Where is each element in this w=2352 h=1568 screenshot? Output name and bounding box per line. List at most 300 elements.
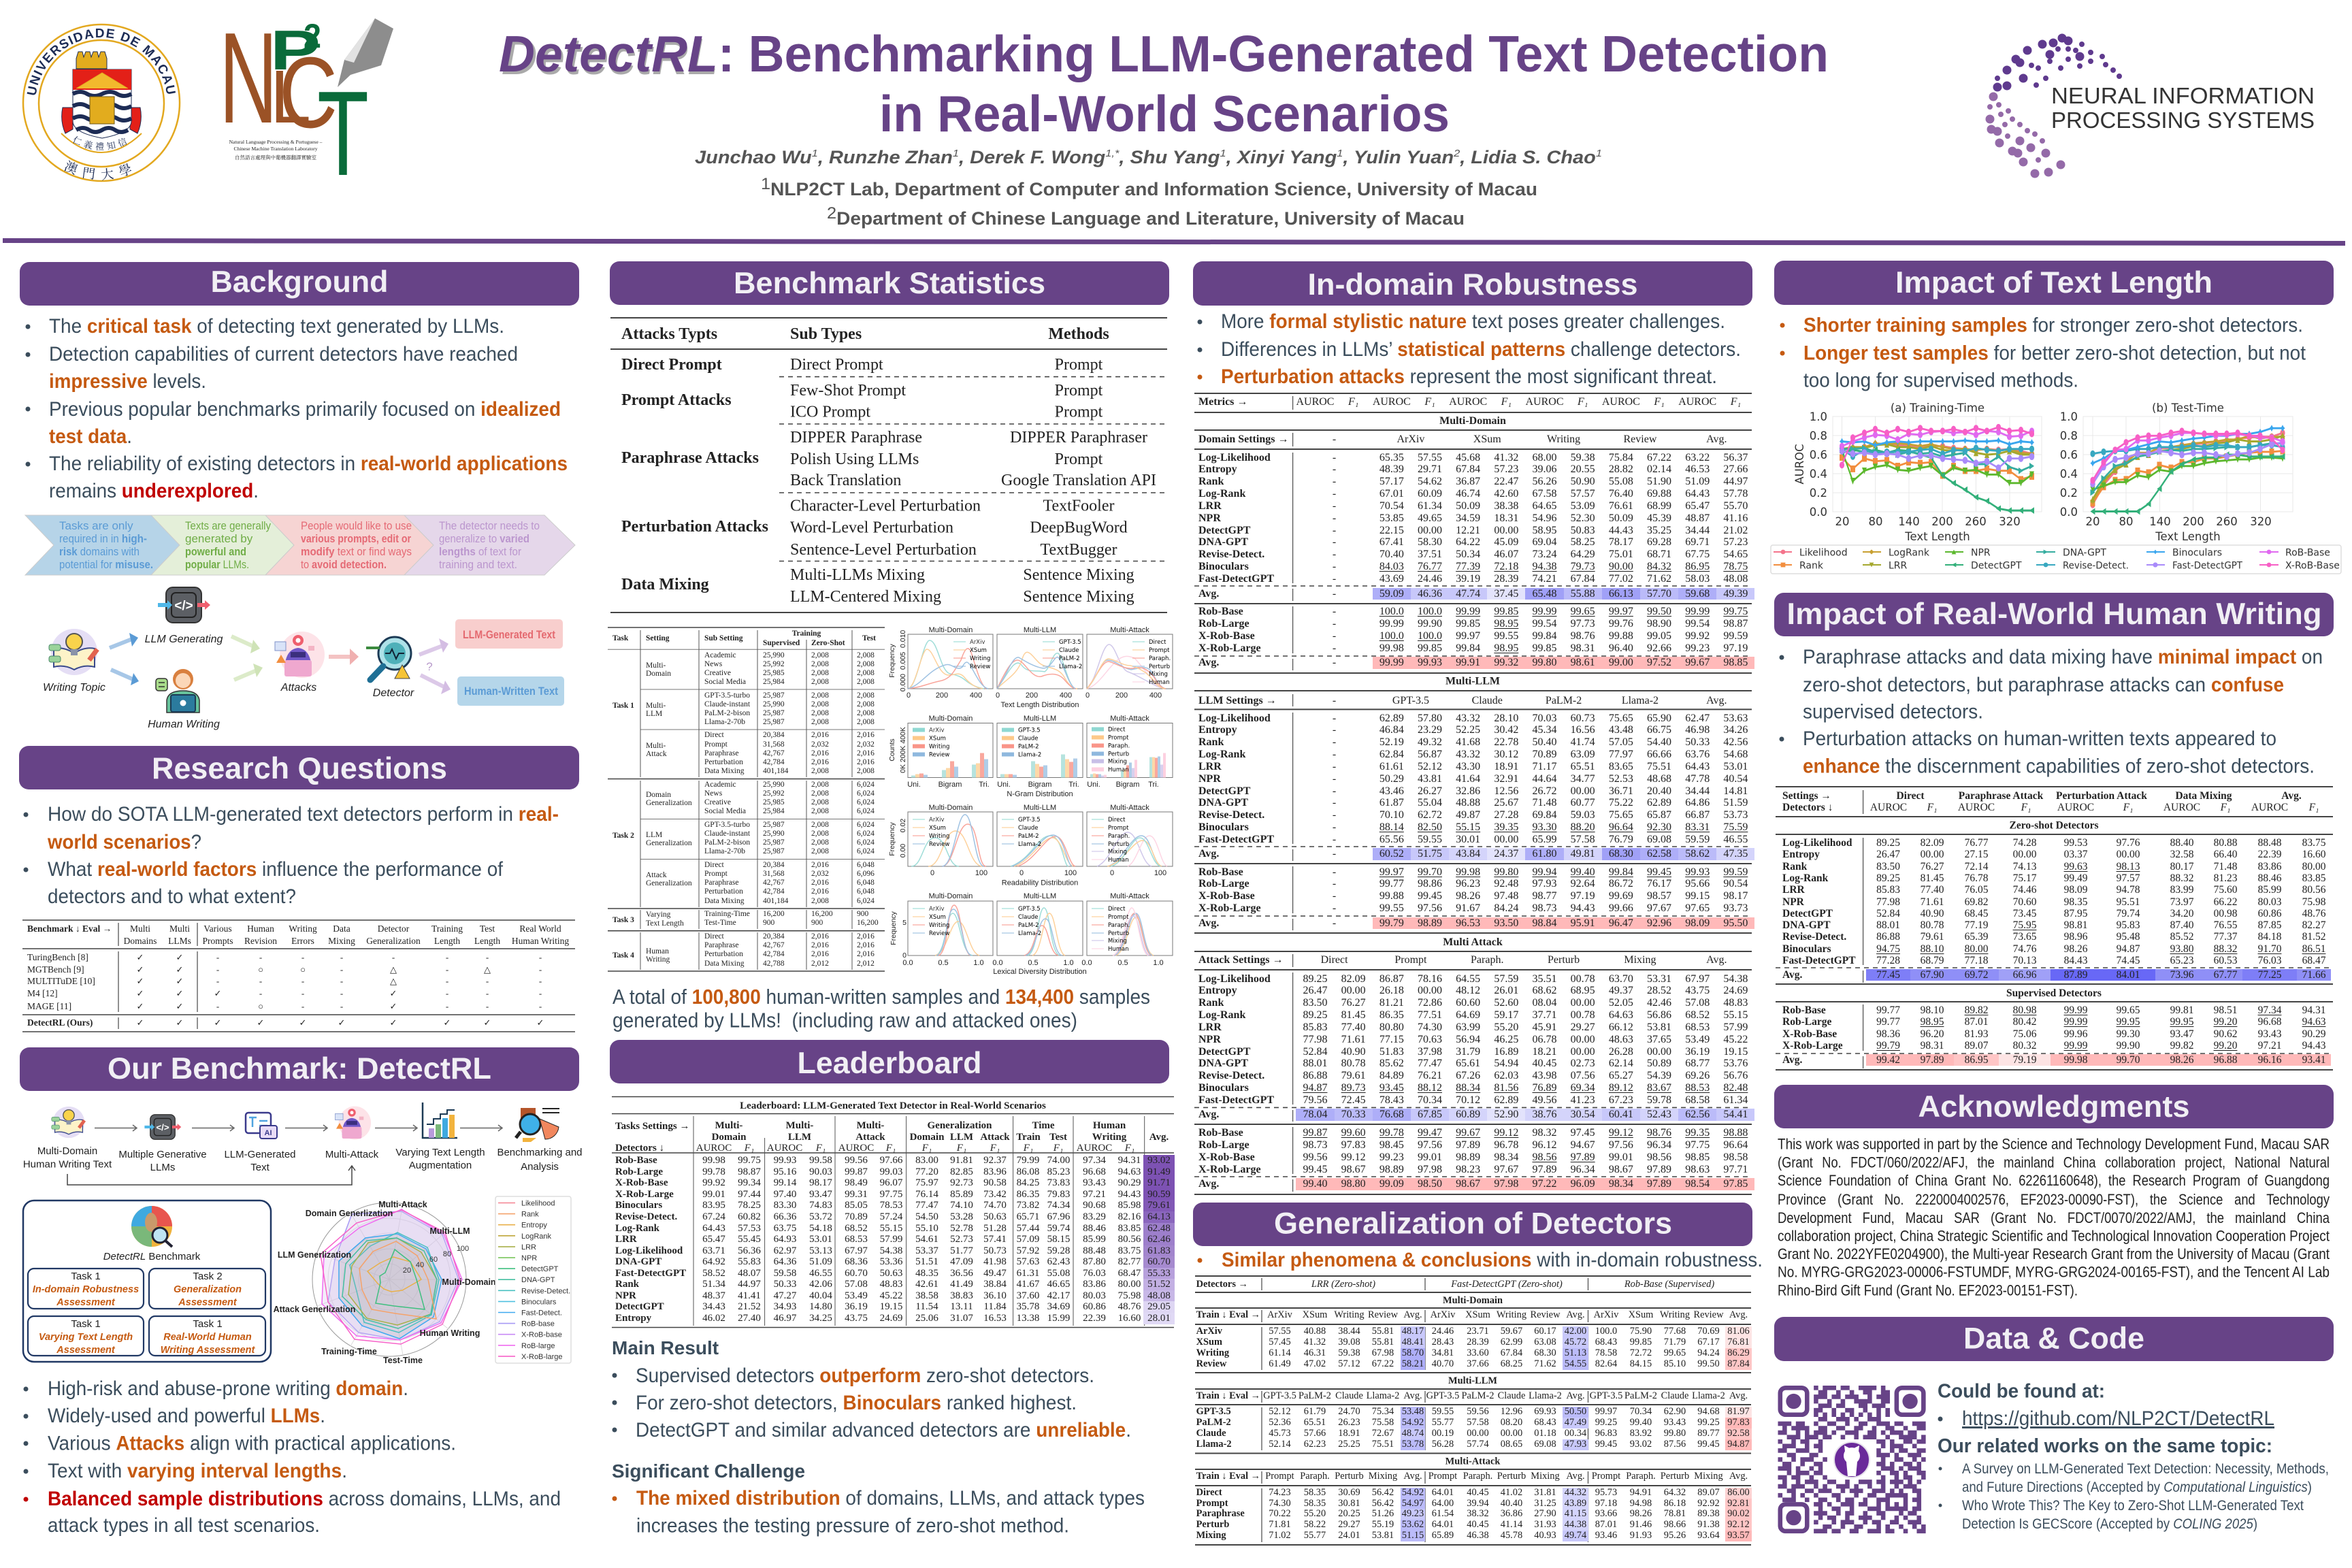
table: benchmark comparison: Length <box>474 936 500 946</box>
table: multi-domain robustness: 99.97 <box>1609 606 1633 617</box>
table: generalization multi-LLM: GPT-3.5 <box>1590 1390 1622 1401</box>
flow: benchmark construction: LLM-Generated <box>224 1149 296 1160</box>
table: multi-attack robustness: 78.04 <box>1303 1109 1327 1120</box>
table: generalization multi-attack: 95.26 <box>1664 1530 1686 1541</box>
table: multi-LLM robustness: 20.40 <box>1647 785 1671 797</box>
table body: dataset settings rows: 6,096 <box>857 870 875 878</box>
table: multi-LLM robustness: 61.80 <box>1533 848 1557 860</box>
table: multi-LLM robustness: 30.42 <box>1494 724 1518 736</box>
charts: distribution small multiples: Readability Distribution <box>1002 879 1078 887</box>
table: leaderboard scores: 51.77 <box>950 1245 973 1256</box>
table: multi-attack robustness: 98.54 <box>1685 1178 1710 1190</box>
table: leaderboard scores: 55.33 <box>1147 1268 1171 1279</box>
table body: dataset settings rows: 6,024 <box>857 789 875 798</box>
table: generalization multi-attack: 86.18 <box>1664 1498 1686 1509</box>
table: leaderboard scores: 57.63 <box>1017 1256 1039 1267</box>
table: human writing scores: X-Rob-Base <box>1782 1028 1837 1040</box>
table body: dataset settings rows: Data Mixing <box>704 960 744 968</box>
table: human writing scores: 98.95 <box>1921 1016 1944 1028</box>
table: human writing scores: 76.27 <box>1921 861 1944 872</box>
table body: dataset settings rows: 42,784 <box>763 887 785 896</box>
table: leaderboard scores: 94.63 <box>1118 1166 1141 1177</box>
table: leaderboard scores: 88.48 <box>1083 1245 1106 1256</box>
table: multi-attack robustness: 48.83 <box>1723 997 1748 1009</box>
icon: human writing <box>156 669 199 713</box>
table: leaderboard scores: 54.50 <box>915 1211 938 1222</box>
table: human writing scores: 77.40 <box>1921 884 1944 896</box>
table: human writing scores: 76.77 <box>1965 837 1988 849</box>
table: multi-domain robustness: 99.85 <box>1533 642 1557 654</box>
table: human writing scores: 80.42 <box>2013 1016 2036 1028</box>
table: benchmark comparison: △ <box>484 964 491 975</box>
table: leaderboard scores: 14.80 <box>809 1301 832 1312</box>
table: benchmark comparison: ✓ <box>176 976 183 986</box>
table: multi-LLM robustness: 83.65 <box>1609 761 1633 772</box>
table: generalization multi-attack: 53.62 <box>1402 1519 1424 1530</box>
chart: radar of detectors: 20 <box>403 1267 411 1275</box>
table: multi-attack robustness: 98.67 <box>1456 1178 1480 1190</box>
table: multi-LLM robustness: 25.67 <box>1494 797 1518 808</box>
table: human writing scores: 91.70 <box>2258 943 2281 955</box>
table: human writing scores: 99.99 <box>2064 1016 2087 1028</box>
table: multi-attack robustness: 68.53 <box>1685 1022 1710 1033</box>
table: human writing scores: Log-Rank <box>1782 872 1828 884</box>
table: leaderboard scores: 15.99 <box>1047 1313 1070 1324</box>
text block: main result: DetectGPT and similar advanced detectors are unreliable. <box>636 1419 1131 1441</box>
table: multi-attack robustness: 00.00 <box>1571 1046 1595 1058</box>
table body: dataset settings rows: 25,990 <box>763 700 785 708</box>
table: human writing scores: 98.09 <box>2064 884 2087 896</box>
table: leaderboard scores: 13.11 <box>950 1301 973 1312</box>
table: generalization multi-domain: 76.81 <box>1727 1337 1750 1348</box>
table frame: dataset settings: Domain <box>646 791 671 799</box>
table: generalization multi-domain: Writing <box>1196 1348 1229 1358</box>
table header: leaderboard: AUROC <box>838 1143 874 1154</box>
table: multi-LLM robustness: 70.89 <box>1533 749 1557 760</box>
table: leaderboard scores: 48.07 <box>738 1268 761 1279</box>
table: generalization multi-attack: Avg. <box>1403 1471 1422 1482</box>
chart: test-time AUROC: Text Length <box>2155 530 2221 543</box>
table: generalization multi-LLM: 53.48 <box>1402 1406 1424 1417</box>
logo: NLP2CT <box>219 6 393 201</box>
chevrons: four problem statements: modify text or find ways <box>301 545 412 558</box>
table: human writing scores: 82.27 <box>2302 919 2325 931</box>
table: multi-LLM robustness: 98.17 <box>1723 890 1748 902</box>
table: attack types: Sentence Mixing <box>1023 588 1134 606</box>
table: human writing scores: 97.89 <box>1921 1054 1944 1066</box>
table: generalization multi-attack: 30.69 <box>1338 1487 1360 1498</box>
table: multi-attack robustness: 97.89 <box>1456 1139 1480 1151</box>
table: attack types: Prompt <box>1055 356 1103 374</box>
table: generalization multi-attack: Paraph. <box>1300 1471 1330 1482</box>
text block: dataset size: generated by LLMs! (including raw and attacked ones) <box>612 1009 1077 1032</box>
table: human writing scores: 80.78 <box>1921 919 1944 931</box>
table: human writing scores: 99.79 <box>1876 1040 1900 1051</box>
charts: distribution small multiples: 400 <box>1060 691 1072 700</box>
table header: leaderboard: Domain <box>712 1132 747 1143</box>
authors: 1 <box>812 148 818 159</box>
table: multi-LLM robustness: Binoculars <box>1198 821 1249 833</box>
table body: dataset settings rows: 2,008 <box>857 767 875 775</box>
table: human writing scores: 73.65 <box>2013 931 2036 943</box>
table body: dataset settings rows: 2,008 <box>811 691 829 700</box>
charts: distribution small multiples: 0.5 <box>938 959 949 967</box>
legend: radar detectors: Rank <box>521 1211 539 1219</box>
table: generalization multi-domain: 39.08 <box>1338 1337 1360 1348</box>
table: leaderboard scores: 96.07 <box>880 1177 902 1188</box>
table: generalization multi-attack: 36.86 <box>1501 1508 1522 1519</box>
table: generalization multi-domain: 68.43 <box>1595 1337 1617 1348</box>
table: multi-LLM robustness: 60.73 <box>1571 713 1595 724</box>
heading: Benchmark Statistics <box>610 261 1169 305</box>
table: human writing scores: 73.45 <box>2013 908 2036 919</box>
table: multi-domain robustness: AUROC <box>1449 396 1487 408</box>
table body: dataset settings rows: 900 <box>763 919 774 927</box>
table: benchmark comparison: Human <box>247 924 274 934</box>
table: leaderboard scores: X-Rob-Large <box>615 1189 674 1200</box>
table: multi-LLM robustness: Rank <box>1198 736 1224 748</box>
table: generalization multi-LLM: 68.43 <box>1534 1417 1556 1428</box>
text block: significant challenge: increases the testing pressure of zero-shot method. <box>636 1515 1069 1537</box>
table: multi-LLM robustness: 43.46 <box>1379 785 1404 797</box>
table frame: dataset settings: Test <box>862 634 876 642</box>
table: leaderboard scores: 75.98 <box>1118 1290 1141 1301</box>
table: leaderboard scores: 98.87 <box>738 1166 761 1177</box>
table: leaderboard scores: 99.93 <box>774 1155 796 1166</box>
table body: dataset settings rows: 2,008 <box>811 807 829 815</box>
table: multi-LLM robustness: 65.56 <box>1379 834 1404 845</box>
table: multi-LLM robustness: 52.12 <box>1418 761 1442 772</box>
table body: dataset settings rows: 25,990 <box>763 651 785 659</box>
table: multi-LLM robustness: 99.93 <box>1685 866 1710 878</box>
table: benchmark comparison: - <box>539 964 542 975</box>
table body: dataset settings rows: Creative <box>704 669 731 677</box>
table: generalization multi-domain: ArXiv <box>1267 1309 1292 1320</box>
table: multi-LLM robustness: 71.48 <box>1533 797 1557 808</box>
table: multi-LLM robustness: 53.73 <box>1723 809 1748 821</box>
legend: line charts: Likelihood <box>1799 547 1848 558</box>
legend: line charts: NPR <box>1971 547 1991 558</box>
table: human writing scores: 89.82 <box>1965 1004 1988 1016</box>
box: DetectRL tasks: Task 1 <box>71 1318 101 1330</box>
table: generalization multi-LLM: 57.74 <box>1467 1439 1489 1450</box>
legend: radar detectors: X-RoB-base <box>521 1331 562 1339</box>
legend: radar detectors: RoB-base <box>521 1320 555 1328</box>
table: generalization multi-attack: 20.25 <box>1338 1508 1360 1519</box>
table: multi-attack robustness: 51.83 <box>1379 1046 1404 1058</box>
affiliation 1: NLP2CT Lab, Department of Computer and Information Science, University of Macau <box>770 179 1537 199</box>
table: generalization multi-LLM: 75.34 <box>1372 1406 1394 1417</box>
table: generalization multi-domain: 94.24 <box>1697 1348 1720 1358</box>
table: generalization multi-attack: 74.23 <box>1269 1487 1291 1498</box>
text block: in-domain findings: More formal stylistic nature text poses greater challenges. <box>1221 310 1725 333</box>
table: leaderboard scores: 53.13 <box>809 1245 832 1256</box>
table: generalization multi-attack: 49.23 <box>1402 1508 1424 1519</box>
table: multi-attack robustness: 53.49 <box>1685 1034 1710 1045</box>
table: generalization multi-LLM: 65.51 <box>1304 1417 1326 1428</box>
table: generalization multi-LLM: 89.77 <box>1697 1428 1720 1439</box>
table: multi-domain robustness: 68.99 <box>1647 500 1671 512</box>
table: generalization multi-domain: XSum <box>1465 1309 1490 1320</box>
table: multi-attack robustness: 68.62 <box>1533 985 1557 996</box>
table: leaderboard scores: 57.09 <box>1017 1234 1039 1245</box>
table body: dataset settings rows: 6,024 <box>857 781 875 789</box>
charts: distribution small multiples: 0.0 <box>1081 959 1092 967</box>
table body: dataset settings rows: 6,024 <box>857 897 875 905</box>
table: human writing scores: 95.83 <box>2117 919 2140 931</box>
table header: leaderboard: Multi- <box>857 1120 884 1131</box>
charts: distribution small multiples: 0.0 <box>902 959 913 967</box>
table: generalization multi-LLM: PaLM-2 <box>1196 1417 1231 1428</box>
chart: training-time AUROC: 140 <box>1898 515 1920 528</box>
table: generalization multi-domain: 58.70 <box>1402 1348 1424 1358</box>
table: human writing scores: 75.06 <box>2013 1028 2036 1040</box>
table: benchmark comparison: TuringBench [8] <box>27 952 88 962</box>
text block: background bullets: The critical task of detecting text generated by LLMs. <box>49 315 504 338</box>
table: human writing scores: 32.58 <box>2170 849 2193 860</box>
legend: line charts: Revise-Detect. <box>2063 561 2129 572</box>
table: leaderboard scores: 46.97 <box>774 1313 796 1324</box>
table: multi-LLM robustness: 50.29 <box>1379 773 1404 785</box>
table body: dataset settings rows: Claude-instant <box>704 830 750 838</box>
table: multi-attack robustness: 80.80 <box>1379 1022 1404 1033</box>
diagram: detection workflow <box>43 587 564 730</box>
table: generalization multi-LLM: 55.77 <box>1432 1417 1454 1428</box>
legend: radar detectors: RoB-large <box>521 1342 555 1350</box>
table: multi-attack robustness: 76.21 <box>1418 1070 1442 1081</box>
table: multi-attack robustness: 45.91 <box>1533 1022 1557 1033</box>
table: multi-attack robustness: Rank <box>1198 997 1224 1009</box>
table: human writing scores: 16.60 <box>2302 849 2325 860</box>
title: DetectRL <box>502 28 718 85</box>
table: multi-LLM robustness: 57.58 <box>1571 834 1595 845</box>
table: multi-LLM robustness: 76.17 <box>1647 878 1671 889</box>
table frame: human writing: Detectors ↓ <box>1782 802 1833 813</box>
table: generalization multi-attack: 31.81 <box>1534 1487 1556 1498</box>
table: multi-attack robustness: 77.15 <box>1379 1034 1404 1045</box>
table: multi-attack robustness <box>1198 954 1754 1190</box>
table: multi-domain robustness: 97.19 <box>1723 642 1748 654</box>
table: leaderboard scores: 99.75 <box>738 1155 761 1166</box>
table: multi-LLM robustness: 97.19 <box>1571 890 1595 902</box>
text block: main result <box>612 1337 1131 1441</box>
table: generalization multi-LLM: 25.25 <box>1338 1439 1360 1450</box>
table: human writing scores: 70.60 <box>2013 896 2036 908</box>
table body: dataset settings rows: 2,016 <box>811 861 829 869</box>
table: generalization multi-domain: Review <box>1196 1358 1226 1369</box>
table: leaderboard scores: 21.52 <box>738 1301 761 1312</box>
table: multi-attack robustness: 99.12 <box>1609 1127 1633 1139</box>
table header: leaderboard: Leaderboard: LLM-Generated Text Detector in Real-World Scenarios <box>740 1100 1046 1111</box>
table body: dataset settings rows: 2,008 <box>811 897 829 905</box>
table: human writing scores: 99.20 <box>2214 1040 2237 1051</box>
table: multi-LLM robustness: 41.74 <box>1571 736 1595 748</box>
table: multi-LLM robustness: Avg. <box>1706 695 1727 706</box>
legend: radar detectors: Revise-Detect. <box>521 1287 570 1295</box>
table: benchmark comparison: - <box>392 952 395 962</box>
table: leaderboard scores: 34.25 <box>809 1313 832 1324</box>
authors: , Runzhe Zhan <box>817 147 953 167</box>
icon: generated text <box>246 1113 277 1139</box>
table: human writing scores: 80.00 <box>2302 861 2325 872</box>
table: multi-LLM robustness: 16.56 <box>1571 724 1595 736</box>
chart: test-time AUROC <box>2060 402 2293 543</box>
table: multi-attack robustness: 94.87 <box>1303 1082 1327 1094</box>
table: multi-LLM robustness: 92.96 <box>1647 917 1671 929</box>
table: multi-domain robustness: AUROC <box>1373 396 1411 408</box>
table: generalization multi-domain: 78.58 <box>1595 1348 1617 1358</box>
table: generalization multi-domain: XSum <box>1196 1337 1222 1348</box>
logo: NLP2CT: C <box>279 37 338 149</box>
table: attack types: Direct Prompt <box>621 356 722 374</box>
table: attack types: Sub Types <box>790 325 862 343</box>
table frame: generalization: Multi-Domain <box>1443 1295 1503 1306</box>
table body: dataset settings rows: 25,984 <box>763 807 785 815</box>
table: multi-domain robustness: Avg. <box>1198 657 1219 668</box>
table: human writing scores: 99.82 <box>2170 1040 2193 1051</box>
table body: dataset settings rows: Paraphrase <box>704 749 738 757</box>
text block: research questions: world scenarios? <box>47 831 201 853</box>
table: multi-attack robustness: 40.45 <box>1533 1058 1557 1069</box>
table: multi-domain robustness: - <box>1333 452 1336 463</box>
table: multi-attack robustness: 84.89 <box>1379 1070 1404 1081</box>
table: human writing scores: 68.45 <box>1965 908 1988 919</box>
table body: dataset settings rows: 6,048 <box>857 861 875 869</box>
text block: dataset size: A total of 100,800 human-written samples and 134,400 samples <box>612 985 1150 1009</box>
table: generalization multi-LLM: 08.20 <box>1501 1417 1522 1428</box>
table: human writing scores: 00.98 <box>2214 908 2237 919</box>
table header: leaderboard: F₁ <box>1053 1143 1063 1154</box>
table: human writing scores: 74.76 <box>2013 943 2036 955</box>
table: multi-LLM robustness: 99.40 <box>1571 866 1595 878</box>
table: multi-LLM robustness: 00.00 <box>1571 785 1595 797</box>
table: generalization multi-LLM: 69.93 <box>1534 1406 1556 1417</box>
table: multi-attack robustness: 26.28 <box>1609 1046 1633 1058</box>
table: human writing scores: 80.17 <box>2170 861 2193 872</box>
table: generalization multi-attack: Avg. <box>1566 1471 1585 1482</box>
table: benchmark comparison: Real World <box>519 924 561 934</box>
legend: radar detectors: Binoculars <box>521 1298 557 1306</box>
charts: distribution small multiples: Bigram <box>1116 781 1139 789</box>
table: multi-domain robustness: 99.85 <box>1418 642 1442 654</box>
table: leaderboard scores: 47.09 <box>950 1256 973 1267</box>
table: human writing scores: 48.76 <box>2302 908 2325 919</box>
table: multi-domain robustness: F₁ <box>1654 396 1665 408</box>
table: generalization multi-LLM: 93.02 <box>1630 1439 1652 1450</box>
table: multi-domain robustness: 98.87 <box>1723 618 1748 630</box>
table frame: rules and section titles: Multi-Domain <box>1439 415 1506 427</box>
table body: dataset settings rows: 2,008 <box>811 709 829 717</box>
table: generalization multi-attack: 29.27 <box>1338 1519 1360 1530</box>
table: leaderboard scores: 67.24 <box>702 1211 725 1222</box>
table: multi-domain robustness: - <box>1333 573 1336 585</box>
table: leaderboard scores: 74.00 <box>1047 1155 1070 1166</box>
table: multi-attack robustness: 97.71 <box>1723 1164 1748 1175</box>
table: multi-LLM robustness: 42.56 <box>1723 736 1748 748</box>
table: multi-domain robustness: 60.09 <box>1418 488 1442 500</box>
table: leaderboard scores: 42.06 <box>809 1279 832 1290</box>
chart: test-time AUROC: 260 <box>2216 515 2238 528</box>
table: leaderboard scores: 78.53 <box>880 1200 902 1211</box>
table: multi-LLM robustness: 97.93 <box>1533 878 1557 889</box>
table: multi-attack robustness: 98.58 <box>1723 1152 1748 1163</box>
title: in Real-World Scenarios <box>879 85 1450 142</box>
table body: dataset settings rows: 2,008 <box>857 691 875 700</box>
table body: dataset settings rows: 2,008 <box>811 651 829 659</box>
table: multi-attack robustness: 08.04 <box>1533 997 1557 1009</box>
table: generalization multi-attack: 71.02 <box>1269 1530 1291 1541</box>
table: multi-domain robustness: 99.93 <box>1418 657 1442 668</box>
table: generalization multi-LLM: 18.91 <box>1338 1428 1360 1439</box>
table header: leaderboard: LLM <box>788 1132 811 1143</box>
table body: dataset settings rows: 25,990 <box>763 781 785 789</box>
table: human writing scores: 99.63 <box>2064 861 2087 872</box>
table: multi-LLM robustness: 65.99 <box>1533 834 1557 845</box>
table: multi-LLM robustness: - <box>1333 890 1336 902</box>
table: multi-attack robustness: Avg. <box>1706 954 1727 966</box>
table: generalization multi-attack: 64.01 <box>1432 1487 1454 1498</box>
chart: training-time AUROC: AUROC <box>1793 444 1806 485</box>
table: leaderboard scores: 93.43 <box>1083 1177 1106 1188</box>
table body: dataset settings rows: 2,008 <box>857 700 875 708</box>
table: human writing scores: 74.45 <box>2117 955 2140 966</box>
table: multi-LLM robustness: 95.50 <box>1723 917 1748 929</box>
text block: data links <box>1938 1380 2329 1532</box>
table body: dataset settings rows: 2,008 <box>857 651 875 659</box>
table: multi-domain robustness: 64.43 <box>1685 488 1710 500</box>
table: human writing scores: 98.13 <box>2117 861 2140 872</box>
chart: radar of detectors <box>274 1200 496 1365</box>
table: multi-LLM robustness: 61.61 <box>1379 761 1404 772</box>
table: leaderboard scores: 62.97 <box>774 1245 796 1256</box>
table: generalization multi-LLM: 61.79 <box>1304 1406 1326 1417</box>
table: leaderboard scores: 99.98 <box>702 1155 725 1166</box>
table: leaderboard scores: 67.96 <box>1047 1211 1070 1222</box>
charts: distribution small multiples: Multi-Domain <box>929 892 973 900</box>
table: generalization multi-attack: 89.07 <box>1697 1487 1720 1498</box>
table: multi-attack robustness: 43.75 <box>1685 985 1710 996</box>
table: human writing scores: 98.51 <box>2214 1004 2237 1016</box>
table: benchmark comparison: - <box>539 976 542 986</box>
table frame: generalization: LRR (Zero-shot) <box>1311 1279 1375 1290</box>
box: DetectRL tasks: Generalization <box>174 1284 242 1295</box>
table: leaderboard scores: 11.84 <box>983 1301 1007 1312</box>
text block: human writing findings: zero-shot detectors, but paraphrase attacks can confuse <box>1803 674 2284 696</box>
table: multi-LLM robustness: Rob-Base <box>1198 866 1243 878</box>
table: leaderboard scores: 99.56 <box>845 1155 868 1166</box>
table: human writing scores: 77.98 <box>1876 896 1900 908</box>
table: leaderboard scores: 64.92 <box>702 1256 725 1267</box>
table: multi-domain robustness: 98.31 <box>1571 642 1595 654</box>
table header: leaderboard: F₁ <box>815 1143 826 1154</box>
table: benchmark comparison: Writing <box>289 924 317 934</box>
table: generalization multi-LLM: 99.80 <box>1664 1428 1686 1439</box>
charts: distribution small multiples: 0.000 0.005 0.010 <box>899 630 907 691</box>
table: generalization multi-LLM: Llama-2 <box>1692 1390 1725 1401</box>
table: generalization multi-LLM: 52.12 <box>1269 1406 1291 1417</box>
text block: main result: For zero-shot detectors, Binoculars ranked highest. <box>636 1392 1077 1414</box>
table: human writing scores: 52.84 <box>1876 908 1900 919</box>
chevrons: four problem statements: Texts are generally <box>185 519 271 532</box>
text block: background bullets: Previous popular benchmarks primarily focused on idealized <box>49 398 561 421</box>
table: benchmark comparison: - <box>486 1001 489 1011</box>
table frame: human writing: AUROC <box>1870 802 1907 813</box>
table: benchmark comparison: Length <box>434 936 460 946</box>
table: multi-attack robustness: 78.16 <box>1418 973 1442 985</box>
table: generalization multi-domain: 61.49 <box>1269 1358 1291 1369</box>
table: multi-LLM robustness: - <box>1333 773 1336 785</box>
chart: training-time AUROC: Text Length <box>1904 530 1970 543</box>
